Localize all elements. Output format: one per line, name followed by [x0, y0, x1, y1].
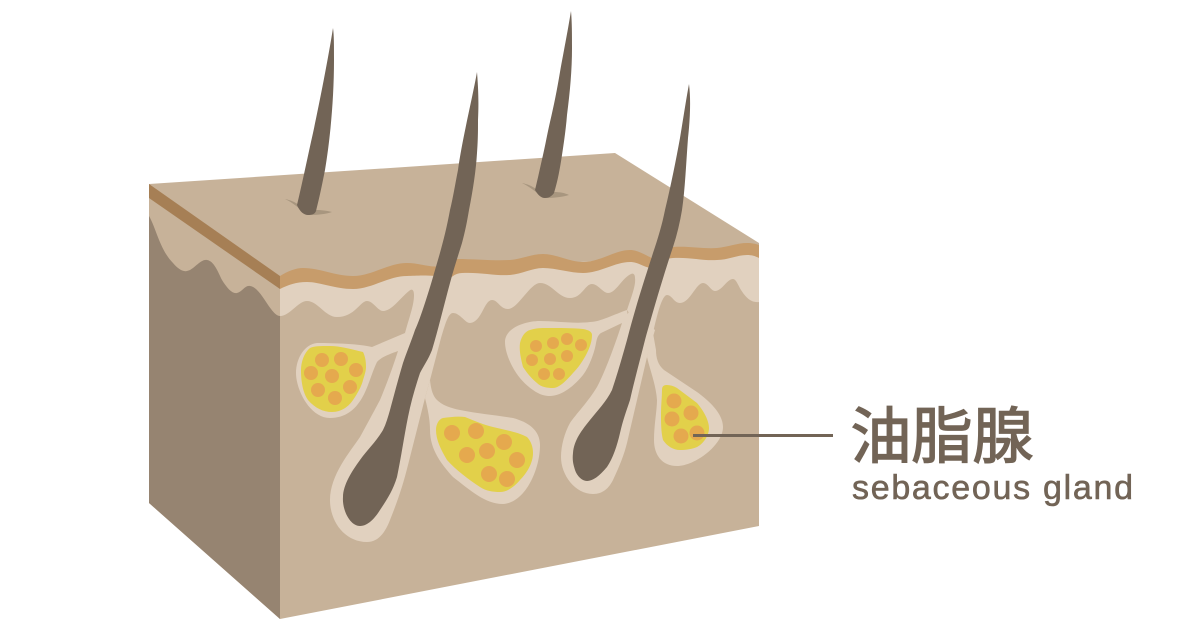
hair follicle sheath right — [561, 310, 655, 494]
block silhouette: top and front faces — [149, 153, 759, 619]
sebaceous gland right — [661, 385, 709, 450]
sebaceous gland left — [301, 346, 366, 412]
hair front left with bulb — [343, 72, 478, 526]
hair back centre with shadow — [522, 11, 572, 198]
left side face, dark — [149, 216, 280, 619]
gland outline left — [296, 333, 412, 418]
skin block — [149, 153, 759, 619]
label: sebaceous gland: sebaceous gland — [852, 469, 1133, 507]
gland outline lower centre — [425, 380, 540, 504]
gland outline right — [647, 333, 723, 466]
sebaceous gland lower centre — [436, 417, 533, 492]
epidermis light layer — [280, 250, 759, 345]
leader line — [693, 434, 833, 437]
left edge skin band — [149, 184, 280, 289]
label: 油脂腺: 油脂腺 — [850, 402, 1034, 470]
front skin surface band — [280, 243, 759, 289]
hair follicle sheath left — [330, 335, 441, 542]
gland outline upper centre — [505, 310, 630, 396]
hair back left with shadow — [285, 28, 334, 215]
hair front right with bulb — [573, 84, 690, 481]
sebaceous gland upper centre — [520, 328, 592, 388]
